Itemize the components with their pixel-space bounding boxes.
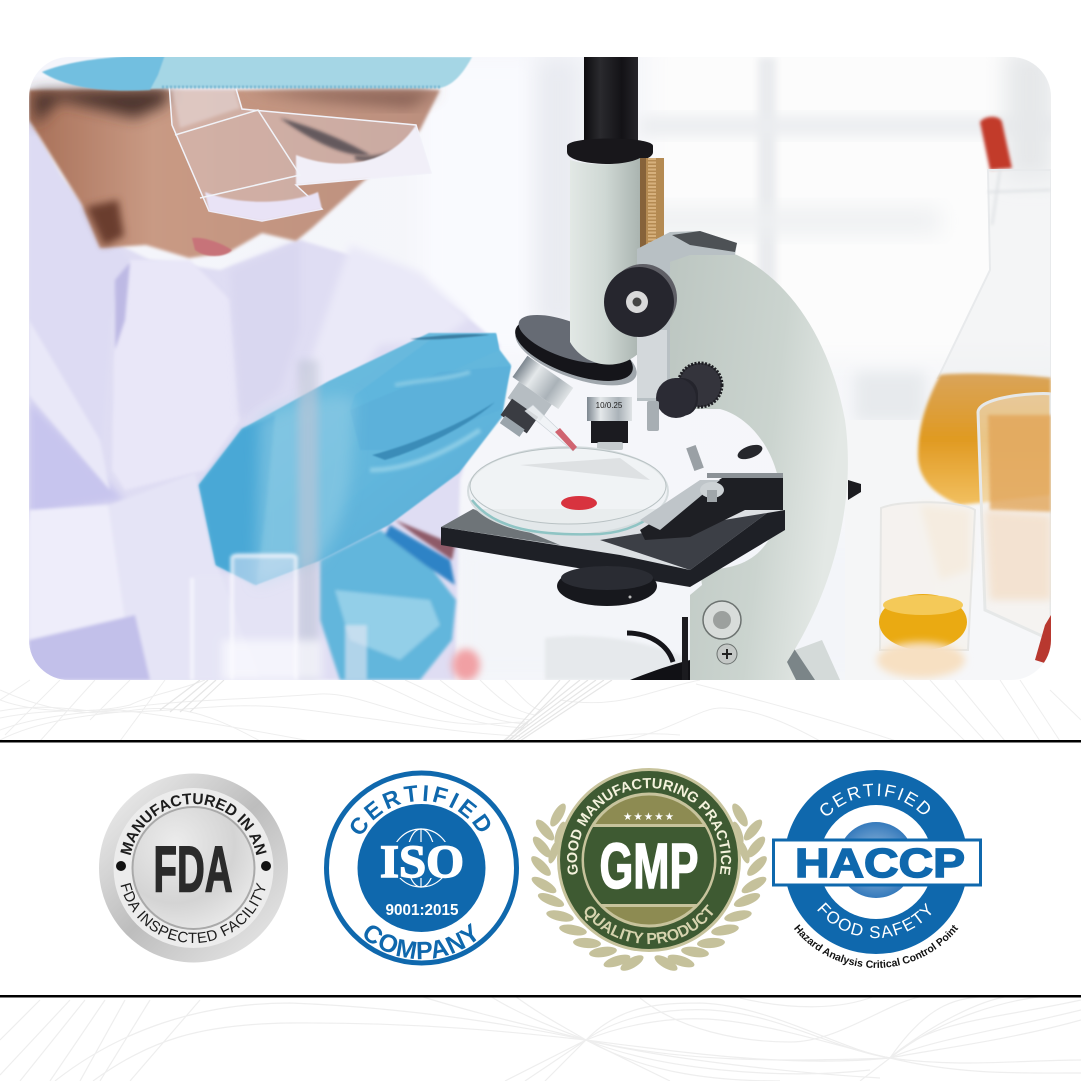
badge: GMP (531, 768, 767, 971)
red blur (452, 649, 480, 681)
badge: FDA (99, 774, 288, 962)
base screws (703, 601, 741, 664)
badge: HACCP: FOOD SAFETY (817, 902, 932, 938)
stage (441, 480, 861, 587)
blurred test tubes (192, 360, 367, 680)
badge: HACCP: CERTIFIED (820, 784, 930, 816)
badge: ISO: CERTIFIED (350, 785, 490, 834)
photo: scientist at microscope (29, 40, 1070, 681)
brass rack (640, 158, 664, 249)
eyepiece column (584, 57, 638, 147)
safety goggles (169, 83, 431, 221)
collar (567, 138, 653, 164)
objective 40x (500, 356, 573, 437)
hair net (42, 55, 472, 91)
badge: HACCP: Hazard Analysis Critical Control Point (794, 924, 958, 968)
face and neck (29, 88, 440, 258)
stage top (441, 509, 783, 570)
microscope mirror base (545, 633, 690, 680)
mechanical slide holder (640, 442, 783, 540)
top bracket (637, 231, 737, 401)
badge: ISO (324, 770, 519, 966)
bottom divider line (0, 995, 1081, 998)
microscope arm (670, 232, 848, 680)
badge: HACCP (772, 770, 982, 968)
objective turret (515, 315, 637, 386)
background wave pattern: bottom band (0, 996, 1081, 1081)
badge: FDA: MANUFACTURED IN AN (120, 793, 267, 856)
badge: GMP: QUALITY PRODUCT (584, 904, 714, 944)
coarse knob (647, 363, 722, 431)
pipette (525, 405, 577, 451)
lab coat (29, 120, 500, 680)
glass beaker right (978, 394, 1051, 665)
badge: ISO: ISO (380, 836, 464, 888)
erlenmeyer flask (918, 117, 1051, 580)
microscope legs (787, 640, 840, 680)
top divider line (0, 740, 1081, 742)
lower glove (320, 520, 456, 680)
badge: GMP: GMP (600, 830, 698, 902)
objective 10x (587, 397, 632, 450)
badge: ISO: 9001:2015 (386, 902, 459, 919)
photo background (29, 40, 1070, 680)
background wave pattern: middle band (0, 680, 1081, 741)
main glove (199, 333, 511, 585)
petri dish (468, 447, 668, 535)
badge: FDA: FDA INSPECTED FACILITY (120, 882, 266, 943)
badge: GMP: ★★★★★ (623, 811, 675, 823)
microscope tube (570, 158, 640, 365)
badge: GMP: GOOD MANUFACTURING PRACTICE (566, 778, 732, 875)
badge: FDA: FDA (154, 832, 232, 906)
badge: ISO: COMPANY (364, 922, 476, 960)
badge: HACCP: HACCP (795, 840, 965, 886)
condenser (557, 566, 657, 606)
small beaker with yellow liquid (877, 502, 975, 678)
arm base dark strip (682, 617, 688, 680)
cuff (29, 500, 150, 680)
focus knob (604, 264, 677, 337)
objective 10x: 10/0.25 (596, 401, 623, 410)
